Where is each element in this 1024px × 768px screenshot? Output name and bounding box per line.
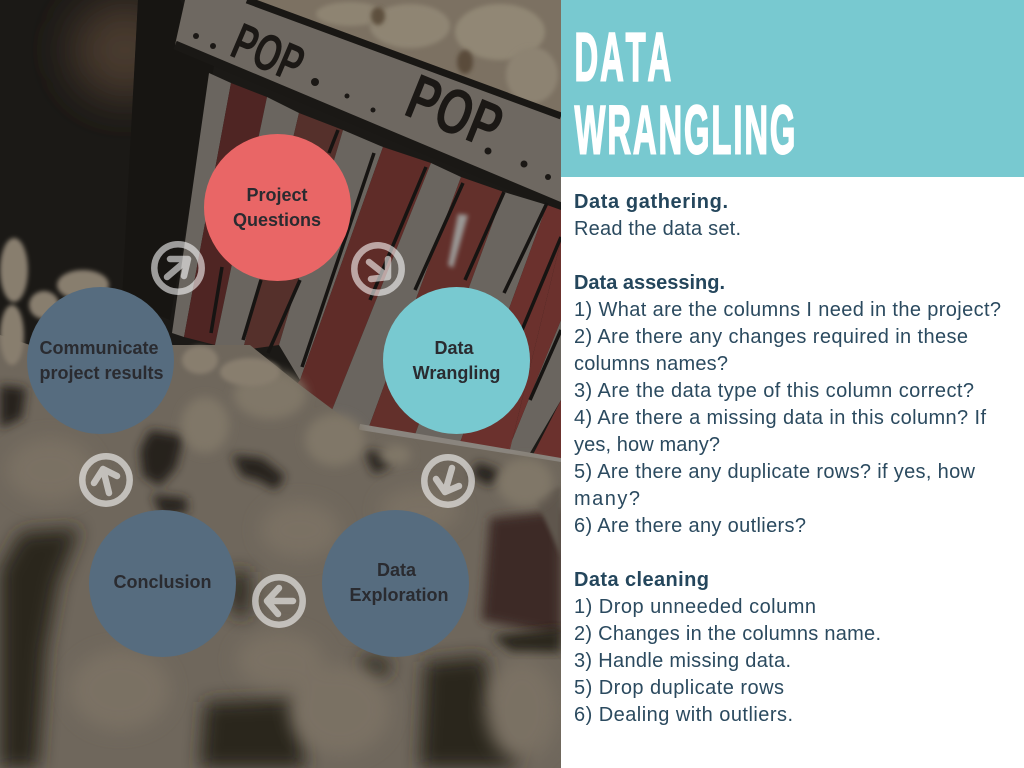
circle: Data Wrangling: Wrangling	[413, 363, 500, 383]
POP lettering	[193, 13, 551, 180]
arrow: Communicate to Project Questions	[154, 244, 202, 292]
section: Data assessing: columns names?	[574, 353, 728, 375]
circle: Project Questions	[204, 134, 351, 281]
section: Data assessing: 2) Are there any changes required in these	[574, 326, 968, 348]
arrow: Data Exploration to Conclusion	[255, 577, 303, 625]
arrow: Project Questions to Data Wrangling	[354, 245, 402, 293]
box bottom edge	[359, 424, 561, 462]
lighter kernels	[181, 371, 553, 506]
popcorn pile	[0, 238, 561, 768]
section: Data gathering	[574, 191, 741, 240]
section: Data cleaning: 2) Changes in the columns name.	[574, 623, 881, 645]
POP lettering: POP	[397, 60, 513, 163]
section: Data cleaning: 5) Drop duplicate rows	[574, 677, 784, 699]
arrow: Data Wrangling to Data Exploration	[424, 457, 472, 505]
circle: Project Questions: Project	[246, 185, 308, 205]
title banner: WRANGLING	[574, 92, 797, 169]
section: Data cleaning: 6) Dealing with outliers.	[574, 704, 793, 726]
arrow: Conclusion to Communicate	[82, 456, 130, 504]
circle: Communicate project results: Communicate	[39, 338, 159, 358]
section: Data cleaning: 3) Handle missing data.	[574, 650, 791, 672]
section: Data assessing: 3) Are the data type of this column correct?	[574, 380, 974, 402]
circle: Communicate project results: project results	[39, 363, 164, 383]
title banner	[561, 0, 1024, 177]
circle: Conclusion	[89, 510, 236, 657]
left popcorn kernels	[0, 238, 280, 386]
boxed lower right	[482, 510, 561, 636]
popcorn above the box rim	[240, 0, 561, 115]
section: Data assessing: yes, how many?	[574, 434, 720, 456]
circle: Data Exploration	[322, 510, 469, 657]
box stripes	[172, 73, 561, 480]
section: Data cleaning: Data cleaning	[574, 569, 709, 591]
section: Data assessing: many?	[574, 488, 640, 510]
circle: Data Wrangling: Data	[434, 338, 474, 358]
dark gaps between kernels	[0, 528, 530, 768]
section: Data assessing	[574, 272, 1001, 537]
circle: Project Questions: Questions	[233, 210, 321, 230]
section: Data cleaning: 1) Drop unneeded column	[574, 596, 816, 618]
section: Data cleaning	[574, 569, 881, 726]
circle: Data Exploration: Exploration	[349, 585, 449, 605]
circle: Conclusion: Conclusion	[114, 572, 212, 592]
background photo: popcorn box	[0, 0, 561, 768]
POP lettering: POP	[223, 13, 312, 94]
section: Data assessing: 1) What are the columns I need in the project?	[574, 299, 1001, 321]
section: Data assessing: Data assessing.	[574, 272, 725, 294]
title banner: DATA	[574, 19, 673, 96]
section: Data gathering: Read the data set.	[574, 218, 741, 240]
circle: Data Wrangling	[383, 287, 530, 434]
section: Data gathering: Data gathering.	[574, 191, 728, 213]
section: Data assessing: 4) Are there a missing data in this column? If	[574, 407, 986, 429]
section: Data assessing: 6) Are there any outliers?	[574, 515, 806, 537]
section: Data assessing: 5) Are there any duplicate rows? if yes, how	[574, 461, 976, 483]
circle: Communicate project results	[27, 287, 174, 434]
box rim band	[175, 0, 561, 207]
circle: Data Exploration: Data	[377, 560, 417, 580]
